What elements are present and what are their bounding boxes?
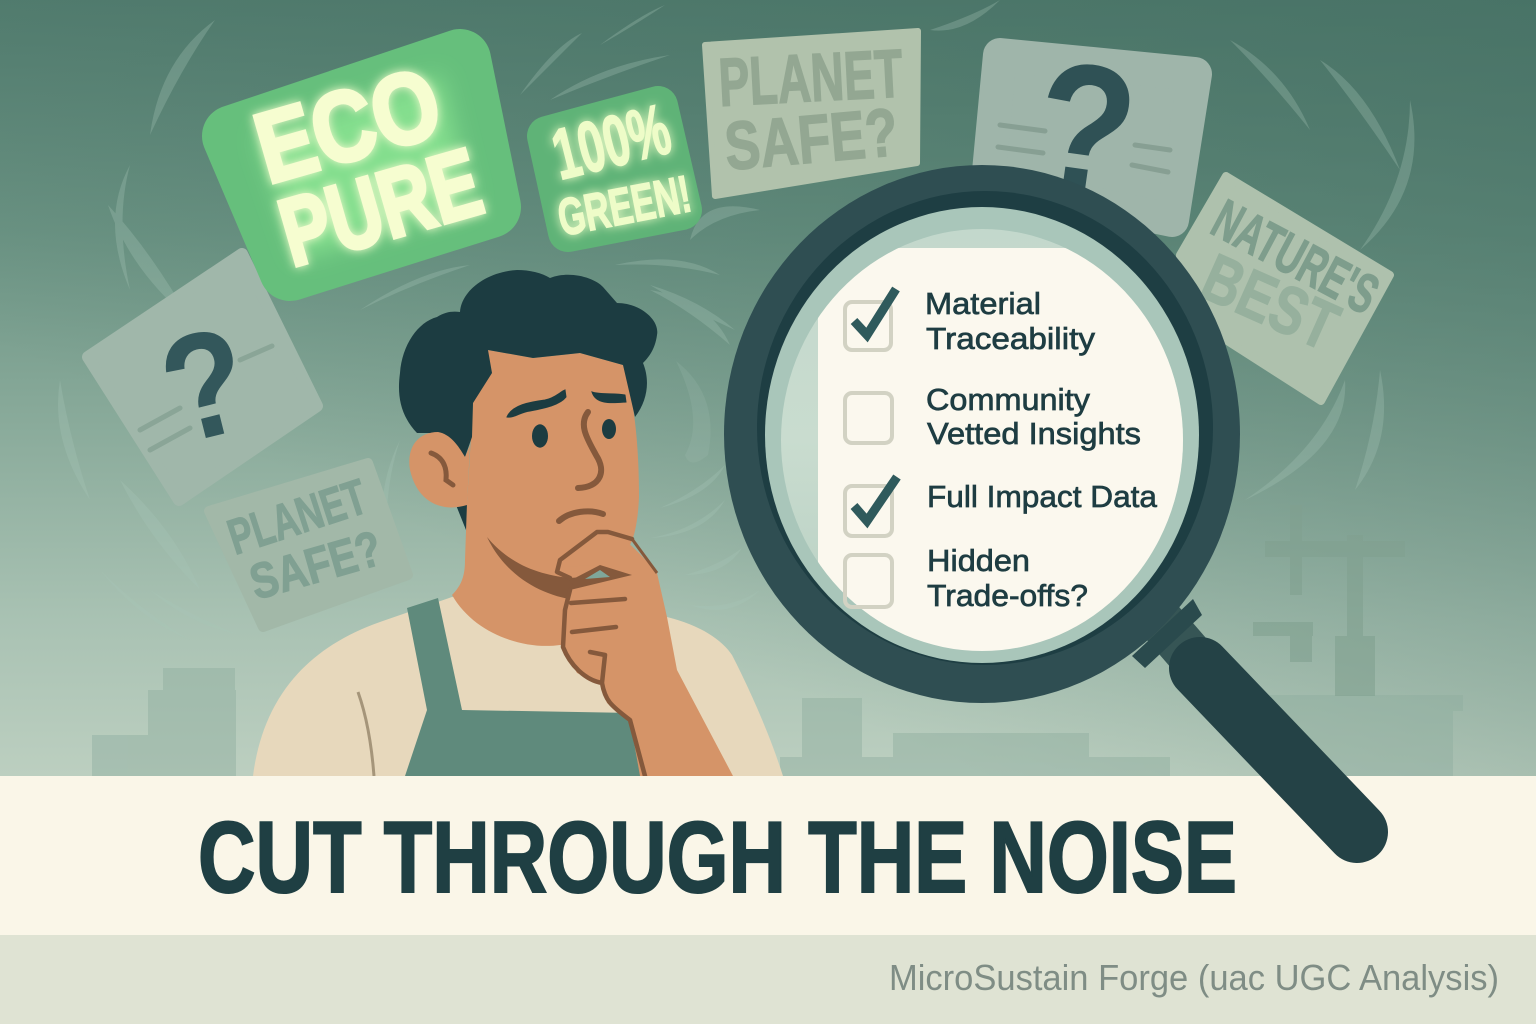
item: community vetted insights <box>845 382 1141 451</box>
card: question mark left <box>88 254 317 500</box>
title: CUT THROUGH THE NOISE <box>198 802 1237 914</box>
background noise swirls <box>58 0 1414 640</box>
machine silhouette <box>1253 505 1405 696</box>
background <box>0 0 1536 776</box>
card: planet safe top <box>705 31 918 196</box>
card: nature's best: BEST <box>1191 239 1350 366</box>
eyes <box>532 424 548 448</box>
factory silhouettes <box>92 668 1463 776</box>
card: planet safe top: SAFE? <box>722 94 901 185</box>
lens frame <box>724 165 1240 703</box>
ear <box>409 432 470 507</box>
card: 100% green badge: 100% <box>545 89 678 196</box>
card: question mark left: ? <box>145 293 265 476</box>
mouth <box>559 511 603 521</box>
item: hidden trade-offs: Hidden <box>927 543 1030 578</box>
item: full impact data <box>845 477 1158 536</box>
glass <box>765 205 1218 668</box>
card: planet safe top: PLANET <box>717 35 905 121</box>
item: material traceability: Traceability <box>926 321 1096 356</box>
man thinking <box>253 270 783 776</box>
card: question mark top right <box>988 22 1195 239</box>
hair back <box>456 505 468 535</box>
card: nature's best <box>1180 176 1390 401</box>
hair <box>399 270 657 457</box>
card: 100% green badge <box>545 89 696 248</box>
hand <box>557 531 733 776</box>
card: eco pure glowing badge: PURE <box>268 128 493 287</box>
card: nature's best: NATURE'S <box>1202 187 1389 326</box>
nose <box>578 412 601 488</box>
card: planet safe left: PLANET <box>221 468 373 565</box>
neck and face <box>452 350 640 646</box>
checklist <box>845 286 1158 613</box>
card: question mark top right: ? <box>1022 22 1148 239</box>
item: material traceability <box>845 286 1096 356</box>
item: hidden trade-offs: Trade-offs? <box>927 578 1088 613</box>
handle <box>1132 599 1357 832</box>
magnifying glass <box>724 165 1357 832</box>
item: community vetted insights: Community <box>926 382 1091 417</box>
item: community vetted insights: Vetted Insights <box>927 416 1141 451</box>
card: eco pure glowing badge: ECO <box>243 46 453 205</box>
source credit: MicroSustain Forge (uac UGC Analysis) <box>889 957 1499 998</box>
eyebrows <box>507 390 626 417</box>
card: 100% green badge: GREEN! <box>553 165 696 248</box>
jaw shadow <box>487 537 610 600</box>
checklist paper <box>818 248 1183 651</box>
title banner <box>0 776 1536 935</box>
card: planet safe left <box>209 463 408 627</box>
shirt <box>253 597 783 776</box>
item: material traceability: Material <box>925 286 1041 321</box>
item: full impact data: Full Impact Data <box>927 479 1158 514</box>
card: planet safe left: SAFE? <box>244 520 388 611</box>
item: hidden trade-offs <box>845 543 1088 613</box>
card: eco pure glowing badge <box>233 46 493 287</box>
footer <box>0 935 1536 1024</box>
apron <box>405 598 645 776</box>
